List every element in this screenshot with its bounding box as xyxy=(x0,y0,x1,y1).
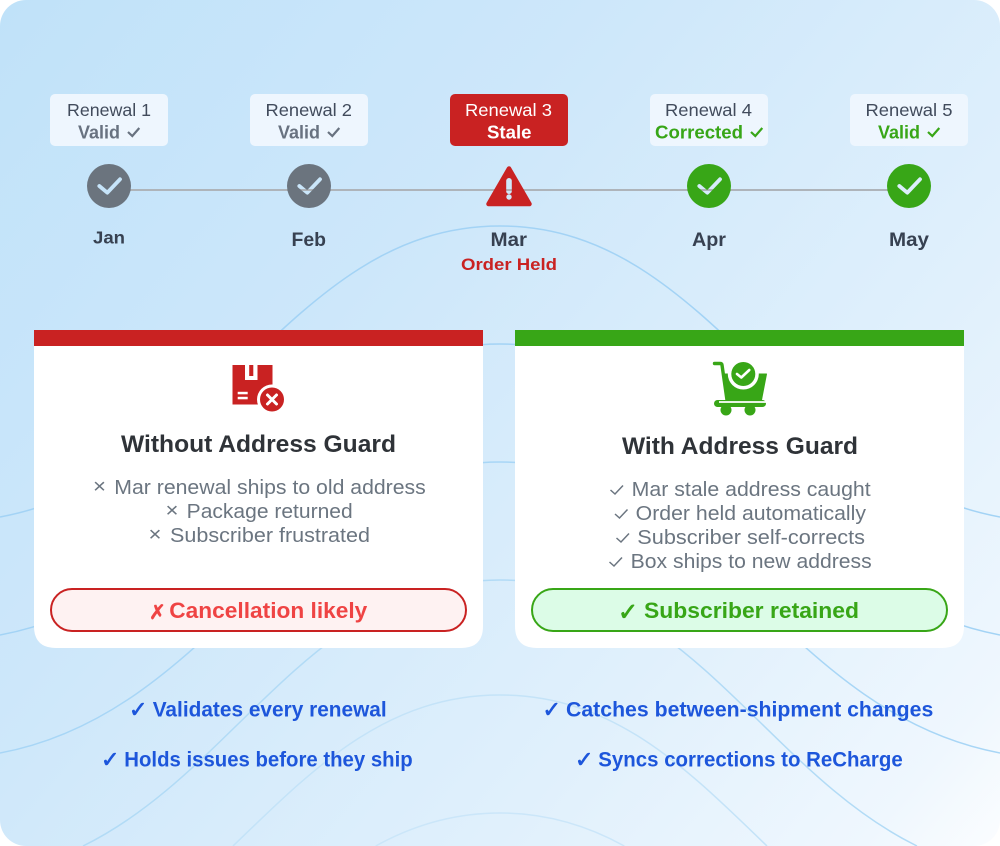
background wave lines xyxy=(0,226,1000,846)
icon: damaged package xyxy=(232,365,287,414)
outcome pill: Cancellation likely: ✗ xyxy=(149,600,166,624)
status card: Renewal 2 xyxy=(250,94,368,146)
heading: With Address Guard: With Address Guard xyxy=(622,433,858,460)
status card: Renewal 5: Valid xyxy=(878,122,920,142)
month label: Jan: Jan xyxy=(93,228,125,248)
outcome pill: Subscriber retained: ✓ xyxy=(618,598,638,626)
list: negative outcomes: × xyxy=(93,476,106,498)
timeline connector line xyxy=(125,189,895,191)
outcome pill: Cancellation likely: Cancellation likely xyxy=(169,598,368,623)
list: negative outcomes: Package returned xyxy=(187,501,353,523)
icon: warning triangle xyxy=(488,168,530,204)
list: positive outcomes xyxy=(610,479,872,573)
status card: Renewal 3 stale xyxy=(450,94,568,146)
timeline step: Renewal 2 xyxy=(250,94,368,251)
status card: Renewal 4: Renewal 4 xyxy=(665,100,752,120)
list: negative outcomes: Subscriber frustrated xyxy=(170,525,370,547)
list: positive outcomes: Mar stale address caught xyxy=(632,479,871,501)
outcome pill: Subscriber retained: Subscriber retained xyxy=(644,598,859,623)
status card: Renewal 4 xyxy=(650,94,768,146)
month label: Feb: Feb xyxy=(292,230,326,251)
list: negative outcomes: × xyxy=(166,500,178,522)
timeline step: Renewal 5 xyxy=(850,94,968,251)
list: positive outcomes: Subscriber self-corrects xyxy=(637,527,865,549)
list: negative outcomes: Mar renewal ships to old address xyxy=(114,477,426,499)
list: negative outcomes: × xyxy=(148,524,162,546)
status card: Renewal 3 stale: Stale xyxy=(487,122,532,142)
benefit: Catches between-shipment changes: ✓ xyxy=(542,698,561,723)
outcome pill: Subscriber retained xyxy=(532,589,947,631)
benefit: Validates every renewal: Validates every renewal xyxy=(153,698,387,722)
status card: Renewal 5 xyxy=(850,94,968,146)
icon: grey check circle Jan xyxy=(87,164,131,208)
icon: shopping cart with check xyxy=(714,358,766,416)
timeline step: Renewal 1 xyxy=(50,94,168,248)
month label: Apr: Apr xyxy=(692,230,727,251)
icon: grey check circle Feb xyxy=(287,164,331,208)
status card: Renewal 3 stale: Renewal 3 xyxy=(465,100,552,120)
icon: green check circle May xyxy=(887,164,931,208)
status card: Renewal 1: Valid xyxy=(78,122,120,142)
panel: with Address Guard xyxy=(515,330,964,648)
benefit: Holds issues before they ship: Holds issues before they ship xyxy=(124,748,413,772)
timeline step: Renewal 4 xyxy=(650,94,768,251)
list: positive outcomes: Box ships to new address xyxy=(631,551,872,573)
benefit: Syncs corrections to ReCharge: ✓ xyxy=(575,748,593,773)
month label: Mar: Mar xyxy=(490,230,528,251)
status card: Renewal 1: Renewal 1 xyxy=(67,100,151,120)
icon: green check circle Apr xyxy=(687,164,731,208)
heading: Without Address Guard: Without Address Guard xyxy=(121,431,396,458)
status card: Renewal 1 xyxy=(50,94,168,146)
benefit: Holds issues before they ship: ✓ xyxy=(101,748,119,773)
benefit: Validates every renewal: ✓ xyxy=(129,698,147,723)
label: Order Held: Order Held xyxy=(461,255,557,274)
status card: Renewal 4: Corrected xyxy=(655,122,743,142)
timeline step: Renewal 3 xyxy=(450,94,568,274)
benefit: Syncs corrections to ReCharge: Syncs corrections to ReCharge xyxy=(598,748,903,772)
status card: Renewal 5: Renewal 5 xyxy=(866,100,952,120)
list: negative outcomes xyxy=(93,476,426,547)
month label: May: May xyxy=(889,230,929,251)
benefit: Catches between-shipment changes: Catches between-shipment changes xyxy=(566,698,933,722)
status card: Renewal 2: Valid xyxy=(278,122,320,142)
outcome pill: Cancellation likely xyxy=(51,589,466,631)
list: positive outcomes: Order held automatically xyxy=(636,503,866,525)
status card: Renewal 2: Renewal 2 xyxy=(266,100,352,120)
panel: without Address Guard xyxy=(34,330,483,648)
